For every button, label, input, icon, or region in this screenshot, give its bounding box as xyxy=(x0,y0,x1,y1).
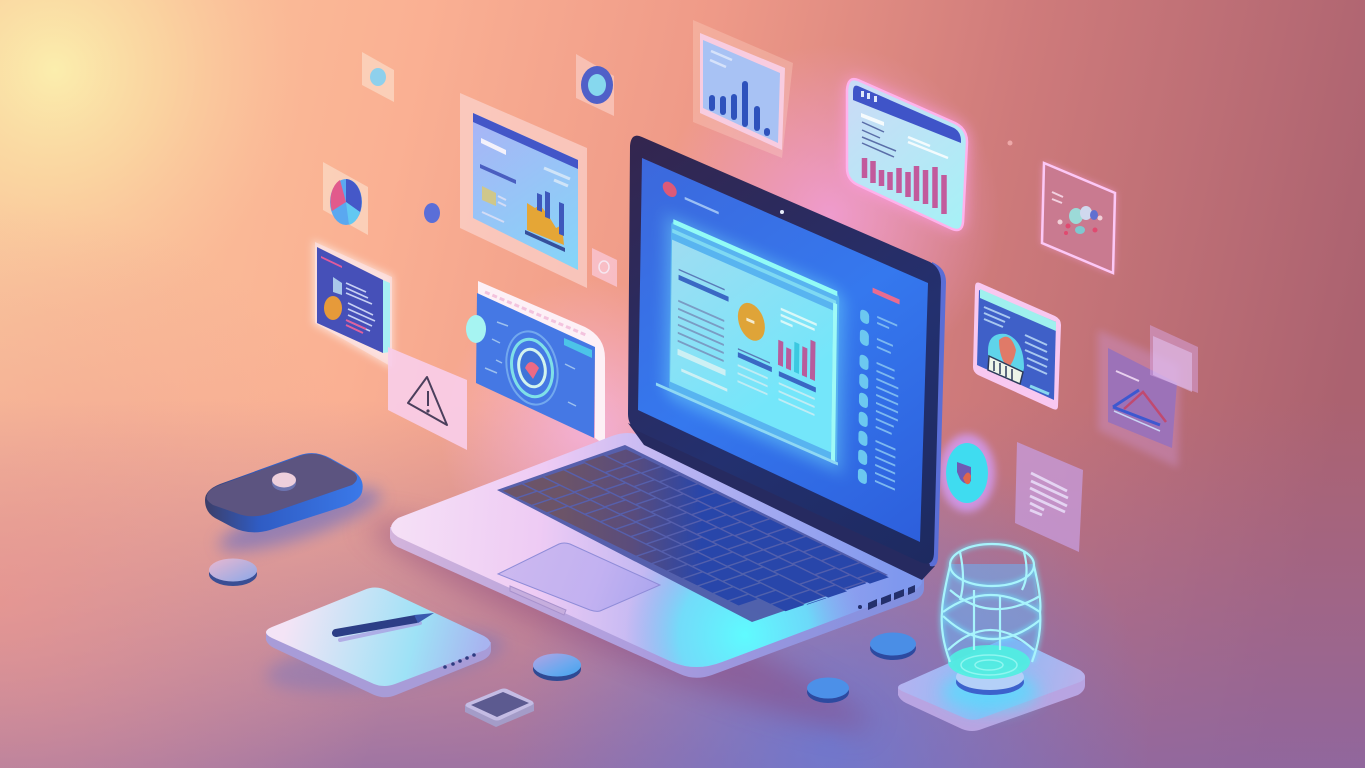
icon: glowing cyan badge xyxy=(939,434,995,512)
cyan reflection on base xyxy=(391,433,922,667)
coin: centre xyxy=(533,654,581,681)
hinge xyxy=(628,423,935,580)
laptop base side xyxy=(390,527,924,678)
touchpad xyxy=(498,543,660,611)
tile: warning triangle xyxy=(388,347,467,450)
header badge xyxy=(663,179,677,199)
card: blue location card xyxy=(973,282,1061,410)
screen bezel xyxy=(628,136,941,564)
coaster with glass xyxy=(898,544,1085,731)
screen lid edge xyxy=(925,262,946,566)
laptop base top xyxy=(391,433,922,667)
right sidebar xyxy=(858,282,900,499)
card: radar dashboard xyxy=(466,281,605,445)
screen display xyxy=(638,158,928,542)
tile: small cyan circle xyxy=(362,52,394,102)
tile: bar chart xyxy=(693,20,793,158)
glass xyxy=(942,544,1040,679)
card: large chart dashboard xyxy=(460,93,587,288)
coin: left xyxy=(209,558,257,586)
glass glow strokes xyxy=(942,544,1040,662)
card: blue text card with coin xyxy=(313,240,393,369)
coin: right upper xyxy=(870,632,916,660)
light beam from card to keyboard xyxy=(596,430,598,460)
coin: right lower xyxy=(807,678,849,703)
glowing document window xyxy=(656,211,843,473)
front notch xyxy=(510,586,566,615)
tiny floating dot xyxy=(1008,140,1012,146)
orange icon xyxy=(738,298,765,346)
keyboard keys xyxy=(510,452,879,615)
laptop xyxy=(390,136,946,678)
tile: document lines xyxy=(1015,442,1083,552)
laptop shadow xyxy=(358,496,882,754)
device: small square chip xyxy=(465,688,534,727)
keyboard well xyxy=(497,445,888,622)
icon: pen xyxy=(336,613,434,640)
card: pink bar chart dashboard xyxy=(847,79,967,230)
ports xyxy=(858,585,915,610)
webcam xyxy=(780,210,784,214)
tile: triangle line chart with overlay xyxy=(1098,325,1198,468)
small blue dot xyxy=(424,203,440,223)
device: dark pill hub xyxy=(205,453,386,563)
small tile: refresh icon xyxy=(592,248,617,287)
device: tablet with pen xyxy=(263,588,507,702)
glass base xyxy=(956,669,1024,695)
tile: pie chart xyxy=(323,162,368,235)
tile: ring icon xyxy=(576,54,614,116)
mini bar chart xyxy=(778,326,816,381)
glass wire strokes xyxy=(942,544,1040,662)
screen content xyxy=(656,177,900,499)
tile: glowing frame scatter chart xyxy=(1042,163,1115,273)
